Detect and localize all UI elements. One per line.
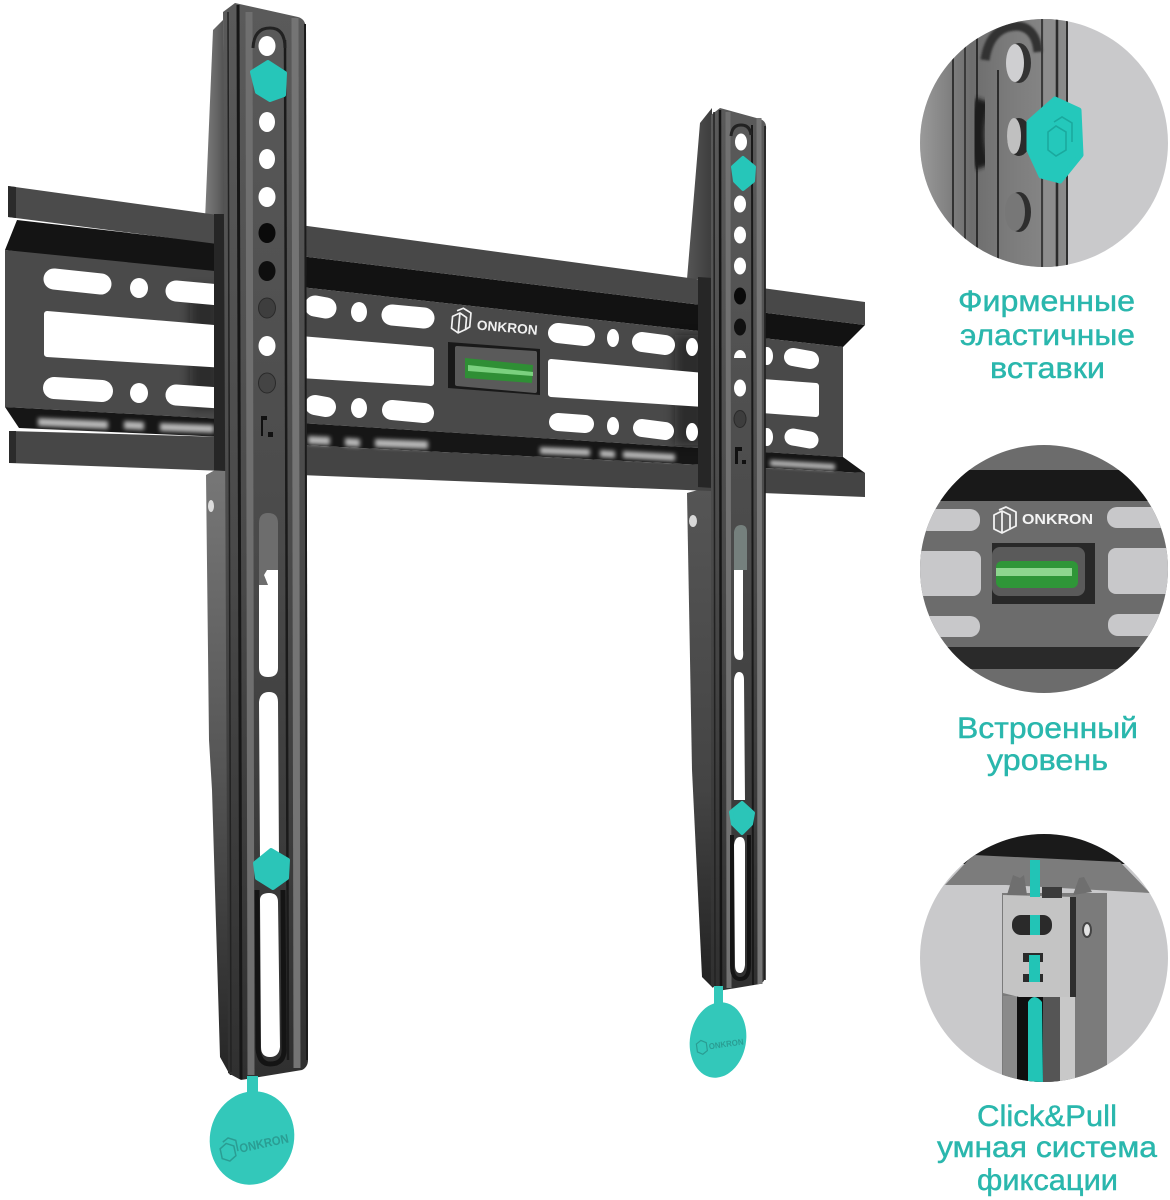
teal hexagon insert [1029,99,1081,181]
slot [1012,915,1052,935]
built-in level on bracket [448,342,540,395]
plate slots [900,507,1170,637]
tab logo text: ONKRON [708,1037,744,1051]
level housing [992,543,1095,604]
tab logo mark [218,1136,240,1163]
lower channel [1003,996,1075,1086]
tab logo text: ONKRON [238,1132,290,1156]
logo mark [994,507,1016,533]
hole bottom [1014,192,1031,232]
plate cut-outs [47,278,816,446]
insert: right top [733,158,754,189]
caption: click and pull: Click&Pull [977,1100,1117,1133]
mounting holes [258,36,276,437]
rail lines [714,110,765,990]
mounting holes [734,134,747,464]
reflections in lower channel [38,418,835,470]
spring [1042,887,1062,898]
slot edge highlight [985,26,1038,60]
caption: elastic inserts [958,285,1135,385]
teal elastic inserts [252,62,754,888]
left upright [223,3,308,1080]
green vial [996,561,1078,588]
insert: left bottom [255,850,288,888]
caption: built-in level: Встроенный [957,712,1138,745]
vertical rail grooves [953,19,1067,267]
soft shadows on plate [190,288,705,445]
logo mark [451,307,471,334]
lower slots [259,513,280,1057]
insert: left top [252,62,285,100]
caption: click and pull: умная система [937,1131,1157,1164]
caption: click and pull: фиксации [977,1164,1118,1197]
upright body [1002,893,1107,1082]
pull tab right [684,986,752,1082]
caption: elastic inserts: Фирменные [958,285,1135,318]
right upright [711,108,766,991]
hole top [1006,43,1031,83]
lower slots [734,525,747,973]
horizontal wall bracket [5,186,865,497]
logo text: ONKRON [1022,512,1093,528]
bracket left section [5,186,225,471]
latch teeth [1007,875,1092,895]
caption: click and pull [937,1100,1157,1197]
screw [208,500,214,512]
side screw [1083,923,1091,937]
logo text: ONKRON [476,318,538,338]
dark top band [963,834,1125,864]
left strut rear wing [205,20,241,1075]
screw [689,515,697,527]
green vial [465,358,533,383]
insert: right bottom [731,803,753,833]
logo [994,507,1093,533]
detail circle: elastic inserts [920,19,1168,267]
detail circle: click and pull [920,834,1168,1086]
dark channels [940,470,1148,501]
latch plate [1003,875,1092,997]
tab logo mark [696,1040,708,1055]
hole with insert peg [1007,118,1027,156]
caption: elastic inserts: эластичные [960,319,1135,352]
caption: built-in level: уровень [987,744,1108,777]
caption: built-in level [957,712,1138,777]
square notch [1023,953,1043,962]
rail lines [228,5,307,1079]
right strut rear wing [687,108,713,988]
detail circle: built-in level [900,445,1170,693]
caption: elastic inserts: вставки [990,352,1105,385]
dark columns behind uprights [214,214,713,488]
bracket right section [300,225,865,497]
brand logo on bracket [451,307,539,340]
pull tab left [200,1076,304,1194]
teal cord [1028,860,1043,1084]
